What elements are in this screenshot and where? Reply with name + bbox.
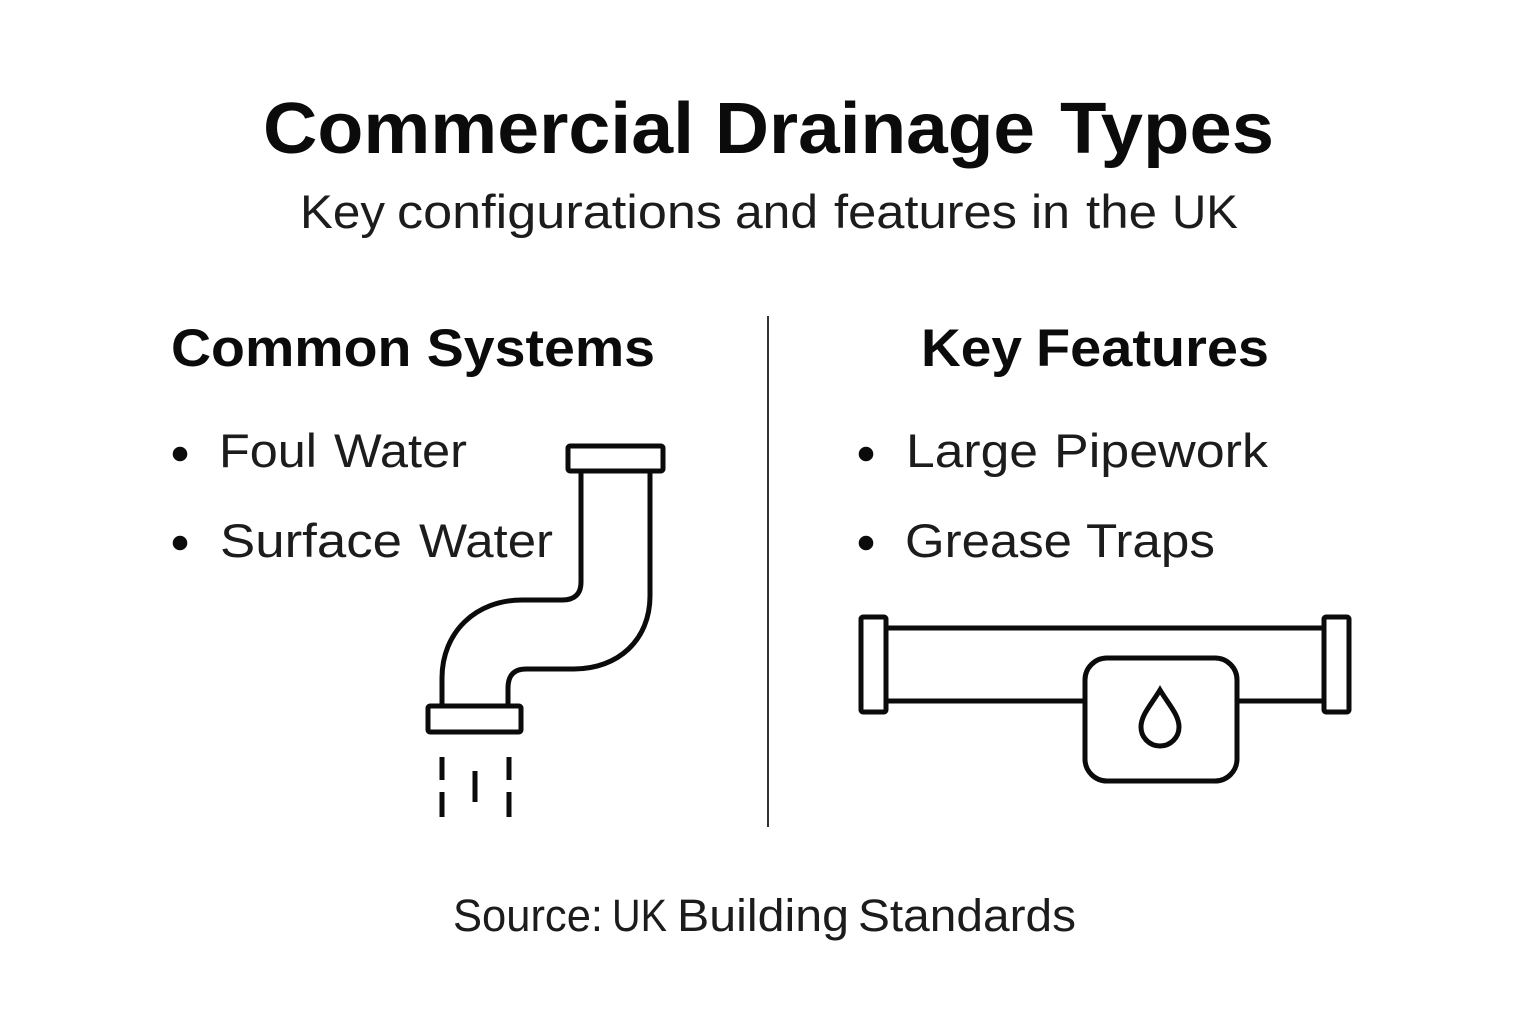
subtitle: in — [1031, 185, 1070, 238]
heading: key features: Features — [1036, 319, 1269, 378]
title: Types — [1060, 89, 1274, 169]
list: systems: Water — [419, 514, 553, 567]
source note: Standards — [858, 890, 1076, 941]
heading: key features — [921, 319, 1269, 378]
subtitle: Key — [300, 185, 386, 238]
subtitle: and — [735, 185, 818, 238]
panel: key features — [859, 319, 1349, 781]
list: systems: Foul — [219, 424, 317, 477]
list: systems — [173, 424, 553, 567]
source note: Source: — [453, 890, 603, 941]
subtitle: configurations — [397, 185, 722, 238]
list: features: Large — [906, 424, 1038, 477]
list: features: Traps — [1086, 514, 1215, 567]
source note: UK — [612, 890, 667, 941]
list: systems: Water — [334, 424, 467, 477]
list: systems: Surface — [220, 514, 402, 567]
subtitle: UK — [1172, 185, 1238, 238]
heading: key features: Key — [921, 319, 1023, 378]
subtitle: the — [1086, 185, 1157, 238]
subtitle: features — [834, 185, 1017, 238]
title — [263, 89, 1274, 169]
title: Commercial — [263, 89, 694, 169]
list: features: Pipework — [1054, 424, 1269, 477]
title: Drainage — [715, 89, 1035, 169]
icon: draining pipe — [428, 446, 663, 817]
list: features: Grease — [905, 514, 1072, 567]
source note: Building — [677, 890, 849, 941]
icon: pipe with grease trap — [861, 617, 1349, 781]
panel: common systems — [171, 319, 663, 817]
subtitle — [300, 185, 1238, 238]
heading: common systems: Common Systems — [171, 319, 655, 378]
list: features — [859, 424, 1269, 567]
source note — [453, 890, 1076, 941]
divider — [767, 316, 769, 827]
